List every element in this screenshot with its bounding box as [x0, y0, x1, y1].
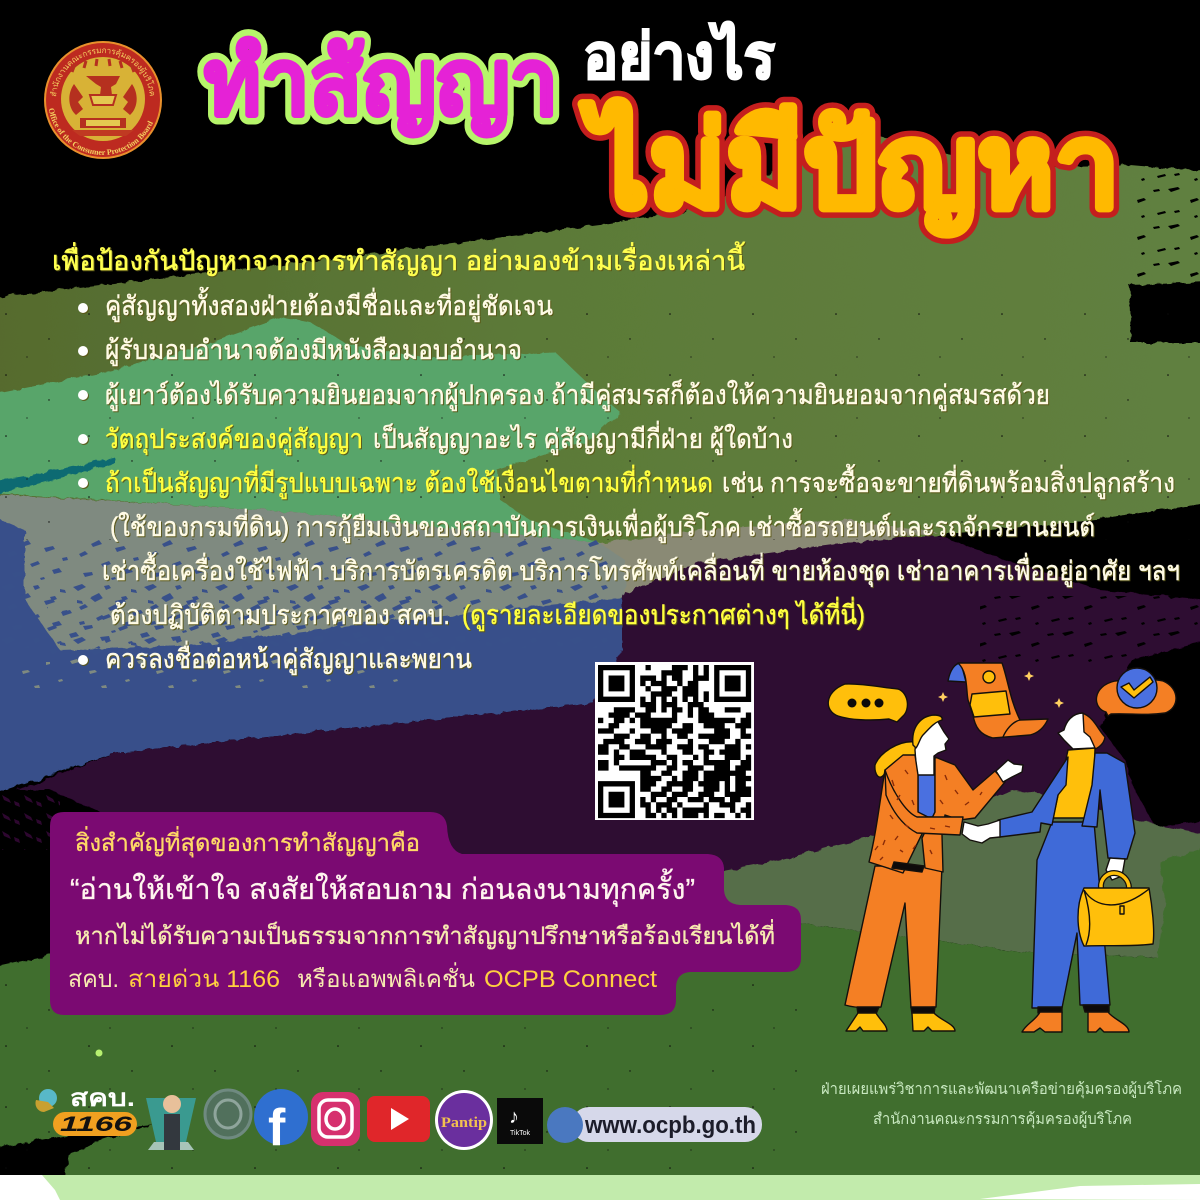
- illustration: two women shaking hands over a contract: [828, 663, 1176, 1032]
- footer credit: [821, 1080, 1182, 1129]
- icon: pantip: Pantip: [441, 1115, 487, 1131]
- icon: hotline 1166: [35, 1085, 137, 1136]
- seal: Office of the Consumer Protection Board: [44, 41, 162, 159]
- icon: tiktok: TikTok: [510, 1130, 530, 1137]
- icon: instagram: [311, 1092, 360, 1146]
- icon: facebook: f: [268, 1099, 286, 1157]
- icon: sparkles: [938, 671, 1064, 708]
- bullets: [78, 303, 88, 665]
- jacket: [998, 757, 1068, 837]
- icon: OCPB coin: [205, 1090, 251, 1138]
- icon: youtube: [367, 1096, 430, 1142]
- title: อย่างไร: อย่างไร: [583, 21, 775, 92]
- item: power of attorney: ผู้รับมอบอำนาจต้องมีหนังสือมอบอำนาจ: [105, 335, 522, 366]
- icon: contract scroll: [948, 663, 1048, 738]
- title: ทำสัญญา: ทำสัญญา: [204, 32, 558, 137]
- seal: Office of the Consumer Protection Board: สำนักงานคณะกรรมการคุ้มครองผู้บริโภค: [50, 48, 154, 96]
- item: purpose: เป็นสัญญาอะไร คู่สัญญามีกี่ฝ่าย ผู้ใดบ้าง: [373, 421, 793, 455]
- item: sign before witnesses: ควรลงชื่อต่อหน้าคู่สัญญาและพยาน: [105, 641, 472, 675]
- item: special forms: ต้องปฏิบัติตามประกาศของ สคบ.: [110, 600, 450, 630]
- QR code: [595, 662, 754, 820]
- item: parties: คู่สัญญาทั้งสองฝ่ายต้องมีชื่อและที่อยู่ชัดเจน: [105, 287, 553, 322]
- icon: tiktok: ♪: [509, 1106, 519, 1128]
- icon: handshake: [962, 820, 1000, 843]
- trousers: [845, 866, 942, 1008]
- text: hotline: สายด่วน 1166: [128, 966, 280, 993]
- item: special forms: (ใช้ของกรมที่ดิน) การกู้ยืมเงินของสถาบันการเงินเพื่อผู้บริโภค เช่าซื้อรถยนต์และรถจักรยานยนต์: [110, 508, 1095, 543]
- text: hotline: [68, 962, 657, 993]
- icon: checkmark bubble: [1096, 668, 1176, 716]
- icon: hotline 1166: 1166: [60, 1113, 132, 1136]
- face and neck: [915, 720, 949, 778]
- icon: website pill: www.ocpb.go.th: [584, 1112, 756, 1139]
- icon: speech bubble with dots: [828, 684, 907, 722]
- icon: facebook: [254, 1089, 308, 1157]
- icon: hotline 1166: สคบ.: [70, 1085, 135, 1112]
- footer credit: ฝ่ายเผยแพร่วิชาการและพัฒนาเครือข่ายคุ้มครองผู้บริโภค: [821, 1080, 1182, 1099]
- item: minors: ผู้เยาว์ต้องได้รับความยินยอมจากผู้ปกครอง ถ้ามีคู่สมรสก็ต้องให้ความยินยอมจากคู่สมรสด้วย: [105, 378, 1050, 411]
- text: quote: “อ่านให้เข้าใจ สงสัยให้สอบถาม ก่อนลงนามทุกครั้ง”: [70, 868, 695, 907]
- item: special forms: (ดูรายละเอียดของประกาศต่างๆ ได้ที่นี่): [462, 597, 865, 631]
- text: complaint advice: หากไม่ได้รับความเป็นธรรมจากการทำสัญญาปรึกษาหรือร้องเรียนได้ที่: [75, 919, 775, 950]
- item: purpose: [105, 421, 793, 455]
- title: ไม่มีปัญหา: ไม่มีปัญหา: [579, 99, 1120, 236]
- figure: woman in blue suit: [998, 713, 1154, 1032]
- icon: cartoon presenter: [146, 1095, 196, 1150]
- hair back: [875, 742, 916, 777]
- text: hotline: สคบ.: [68, 966, 119, 993]
- panel: key message: [50, 812, 801, 1015]
- text block: contract checklist: [52, 241, 1180, 675]
- footer: social icons: [35, 1085, 762, 1157]
- title: ไม่มีปัญหา: ไม่มีปัญหา: [579, 99, 1120, 236]
- text: hotline: OCPB Connect: [484, 966, 657, 993]
- icon: website pill: [547, 1107, 762, 1143]
- heading: intro line: เพื่อป้องกันปัญหาจากการทำสัญญา อย่ามองข้ามเรื่องเหล่านี้: [52, 241, 745, 276]
- jacket: [869, 755, 930, 873]
- figure: woman in orange suit: [845, 715, 1023, 1031]
- seal: Office of the Consumer Protection Board: Office of the Consumer Protection Board: [49, 108, 153, 155]
- top: [1053, 748, 1095, 818]
- text: lead-in: สิ่งสำคัญที่สุดของการทำสัญญาคือ: [75, 826, 420, 858]
- item: special forms: [102, 464, 1180, 631]
- title: ทำสัญญา: ทำสัญญา: [204, 32, 558, 137]
- icon: pantip: [435, 1090, 493, 1150]
- item: purpose: วัตถุประสงค์ของคู่สัญญา: [105, 424, 363, 455]
- item: special forms: ถ้าเป็นสัญญาที่มีรูปแบบเฉพาะ ต้องใช้เงื่อนไขตามที่กำหนด: [105, 465, 713, 499]
- handbag: [1078, 888, 1154, 946]
- text: hotline: หรือแอพพลิเคชั่น: [297, 962, 475, 993]
- icon: tiktok: [497, 1098, 543, 1144]
- footer credit: สำนักงานคณะกรรมการคุ้มครองผู้บริโภค: [873, 1110, 1132, 1129]
- trousers: [1032, 822, 1110, 1008]
